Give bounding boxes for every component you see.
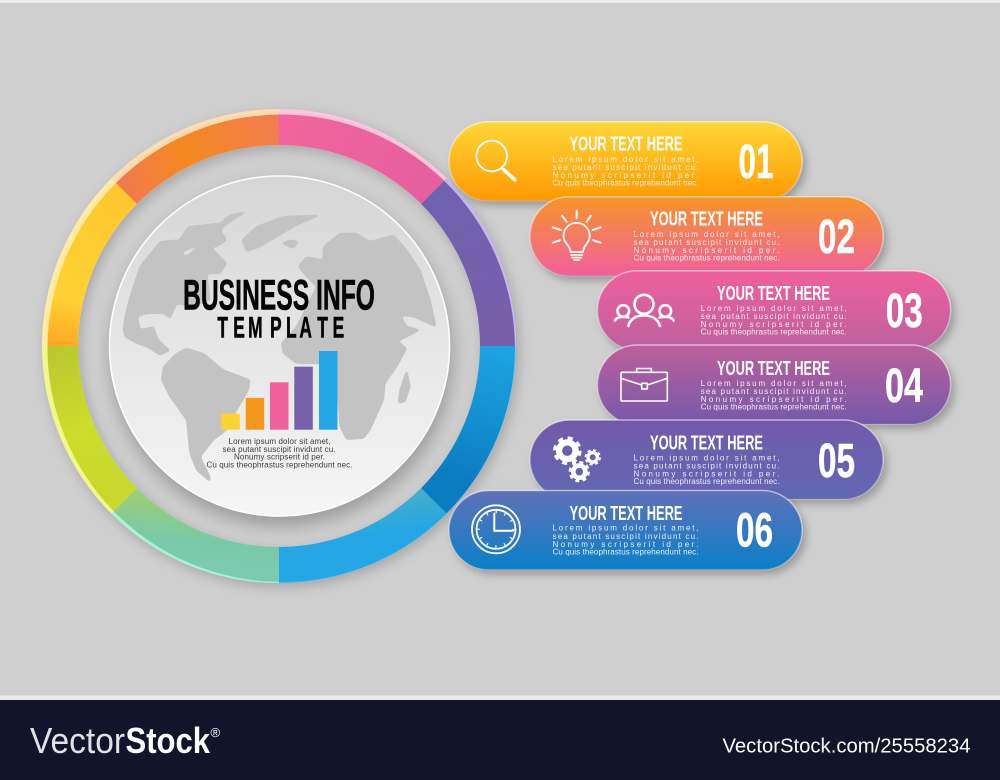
text: item 01: sea putant suscipit invidunt cu.: [552, 163, 698, 172]
centre text block: Cu quis theophrastus reprehendunt nec.: [206, 461, 352, 470]
segment: light blue: [279, 488, 446, 582]
text: item 03: Lorem ipsum dolor sit amet,: [701, 304, 847, 313]
footer bar: [0, 696, 1000, 780]
text: item 01: [552, 133, 774, 189]
segment: purple: [421, 181, 515, 346]
panel: item 06: [449, 490, 802, 570]
text: item 03: 03: [886, 285, 923, 338]
text: item 06: YOUR TEXT HERE: [570, 502, 682, 525]
text: item 03: Cu quis theophrastus reprehendunt nec.: [701, 328, 847, 337]
text: item 02: sea putant suscipit invidunt cu.: [634, 238, 780, 247]
text: item 03: YOUR TEXT HERE: [717, 282, 830, 305]
text: item 01: 01: [738, 136, 774, 189]
panel: item 03: [598, 271, 950, 350]
segment: pink: [279, 114, 444, 204]
panel: item 02: [530, 197, 883, 276]
text: item 01: Lorem ipsum dolor sit amet,: [552, 155, 698, 164]
segment: orange: [116, 114, 279, 204]
text: item 05: YOUR TEXT HERE: [650, 432, 763, 454]
segment: yellow: [48, 183, 137, 346]
icon: clock: [472, 505, 520, 553]
text: item 05: Nonumy scripserit id per.: [634, 470, 779, 478]
text: item 01: YOUR TEXT HERE: [570, 133, 682, 156]
centre text block: sea putant suscipit invidunt cu.: [222, 445, 336, 454]
text: item 03: [701, 282, 923, 338]
text: item 04: sea putant suscipit invidunt cu.: [701, 387, 847, 396]
text: item 06: Nonumy scripserit id per.: [552, 540, 698, 549]
footer logo: VectorStock: Stock: [126, 720, 211, 761]
centre disc: [110, 176, 450, 516]
icon: light bulb: [553, 211, 601, 260]
bar chart: [221, 351, 338, 430]
centre text block: Lorem ipsum dolor sit amet,: [228, 437, 330, 446]
text: item 04: Cu quis theophrastus reprehendunt nec.: [701, 402, 847, 412]
segment: lime: [47, 346, 137, 511]
panel: item 01: [449, 122, 802, 201]
text: item 02: Cu quis theophrastus reprehendunt nec.: [634, 254, 780, 263]
text: item 06: Cu quis theophrastus reprehendunt nec.: [552, 548, 698, 557]
text: item 04: 04: [885, 360, 923, 413]
text: item 05: [634, 432, 855, 488]
panel: item 04: [598, 345, 950, 424]
ring of eight coloured segments: [42, 109, 516, 583]
world map: [123, 212, 436, 482]
centre text block: Nonumy scripserit id per.: [234, 453, 325, 462]
footer id text: VectorStock.com/25558234: [722, 736, 970, 758]
text: item 04: Nonumy scripserit id per.: [701, 395, 847, 404]
icon: briefcase: [621, 368, 667, 401]
text: item 04: Lorem ipsum dolor sit amet,: [701, 379, 847, 388]
text: item 06: sea putant suscipit invidunt cu.: [552, 532, 698, 541]
text: item 06: [552, 502, 773, 558]
text: item 02: YOUR TEXT HERE: [650, 207, 763, 230]
text: item 05: sea putant suscipit invidunt cu.: [634, 462, 780, 470]
text: item 05: Lorem ipsum dolor sit amet,: [634, 454, 780, 462]
footer logo: VectorStock: ®: [210, 725, 220, 740]
subtitle: TEMPLATE: TEMPLATE: [217, 312, 344, 345]
text: item 04: [701, 357, 923, 413]
title: BUSINESS INFO: BUSINESS INFO: [183, 272, 375, 320]
text: item 02: Lorem ipsum dolor sit amet,: [634, 230, 780, 239]
segment: blue: [421, 346, 515, 513]
text: item 01: Nonumy scripserit id per.: [552, 171, 698, 180]
footer logo: VectorStock: Vector: [30, 720, 125, 761]
centre text block: [206, 437, 352, 470]
footer logo: VectorStock: [30, 720, 220, 761]
text: item 06: 06: [736, 505, 773, 558]
text: item 03: Nonumy scripserit id per.: [701, 320, 847, 329]
text: item 02: 02: [818, 211, 855, 264]
text: item 01: Cu quis theophrastus reprehendunt nec.: [552, 179, 698, 188]
text: item 05: Cu quis theophrastus reprehendunt nec.: [634, 477, 780, 486]
text: item 03: sea putant suscipit invidunt cu.: [701, 312, 847, 321]
text: item 04: YOUR TEXT HERE: [717, 357, 830, 380]
text: item 06: Lorem ipsum dolor sit amet,: [552, 524, 698, 533]
text: item 02: Nonumy scripserit id per.: [634, 246, 779, 255]
segment: teal green: [114, 488, 279, 582]
icon: gears: [555, 438, 600, 481]
text: item 05: 05: [818, 435, 855, 488]
icon: people: [615, 295, 674, 326]
icon: magnifier: [476, 141, 515, 180]
panel: item 05: [530, 420, 883, 499]
text: item 02: [634, 207, 855, 264]
